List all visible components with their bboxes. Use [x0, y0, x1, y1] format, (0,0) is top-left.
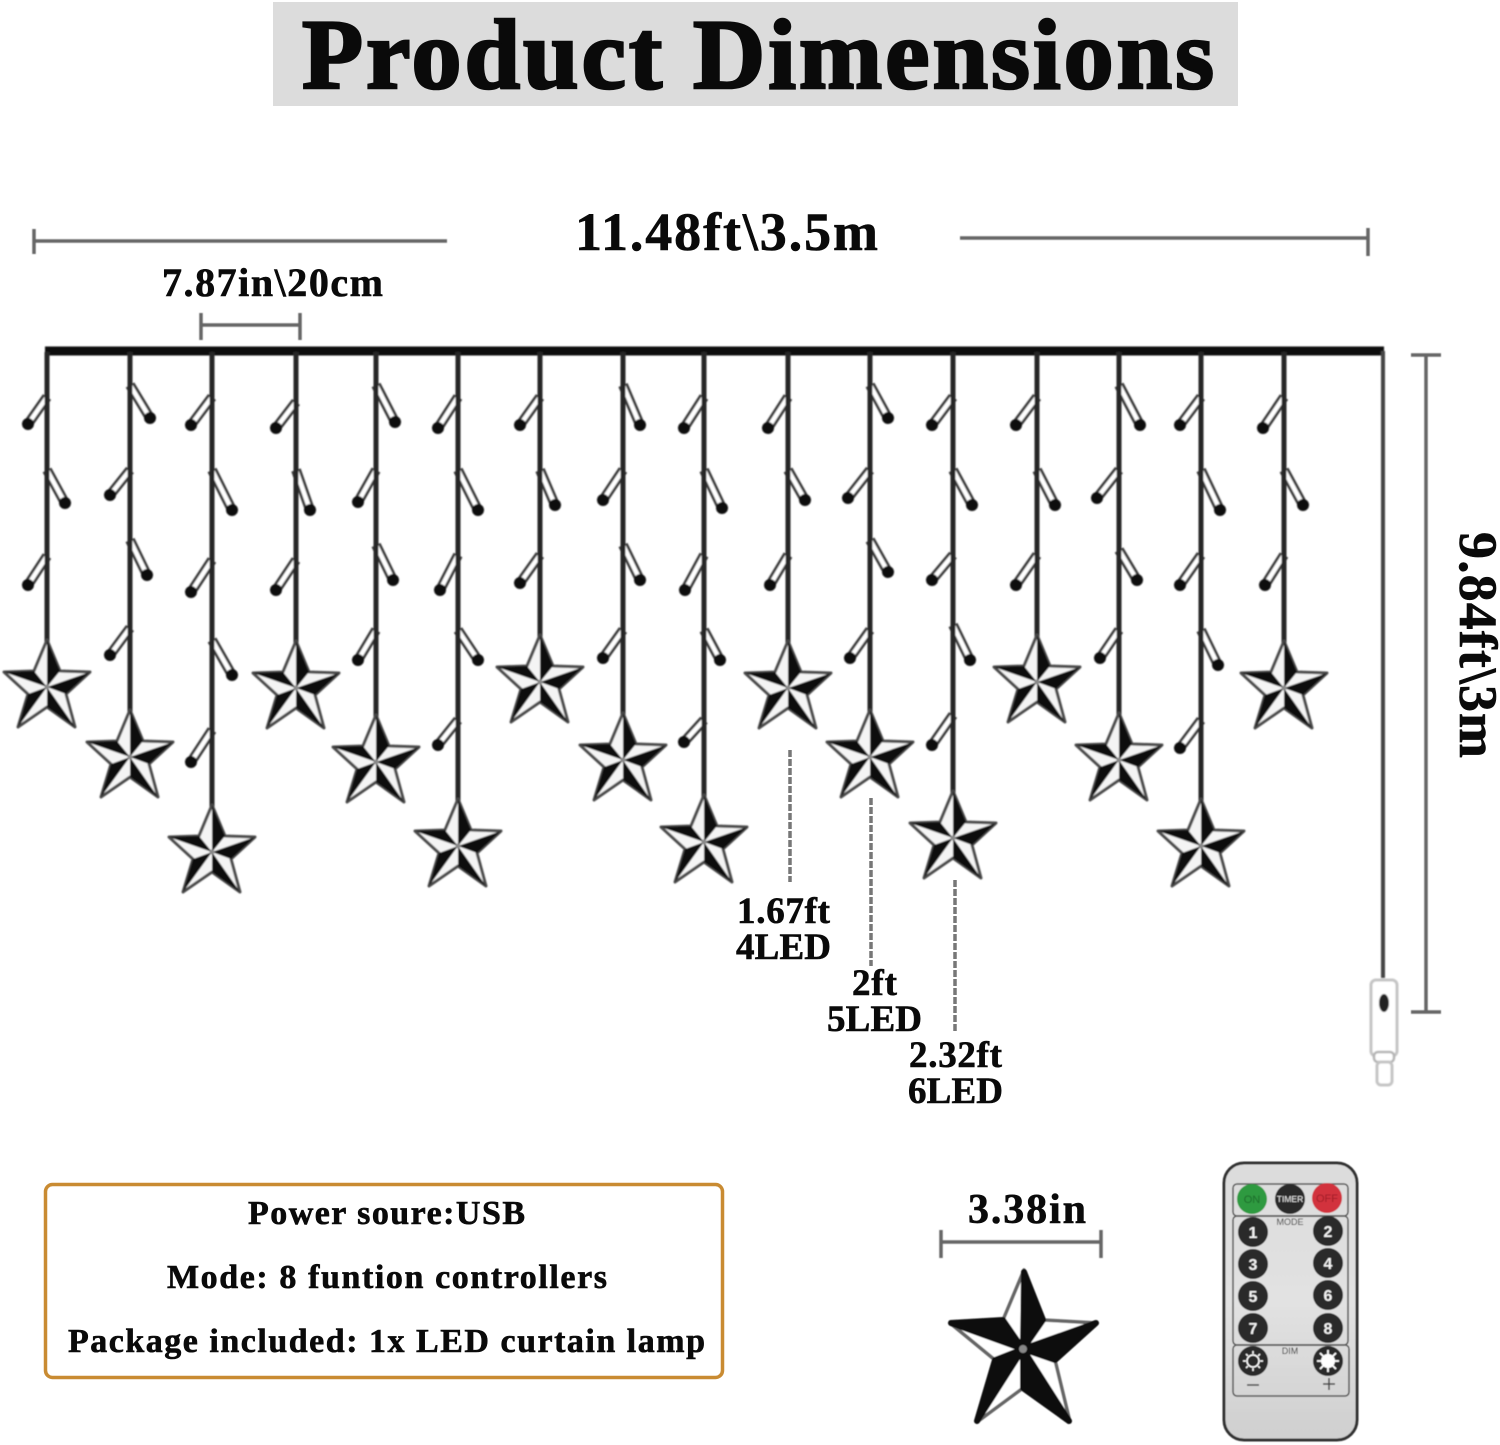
mode buttons: 6 [1324, 1288, 1333, 1305]
dim label: DIM [1282, 1346, 1298, 1356]
strand 10 [745, 352, 831, 728]
star size dimension: 3.38in: 3.38in [968, 1187, 1086, 1233]
width dimension: 11.48ft\3.5m: 11.48ft\3.5m [575, 202, 878, 262]
callout: 5LED strand: 5LED [827, 999, 922, 1040]
strand 12 [910, 352, 996, 878]
strand 8 [580, 352, 666, 800]
power and timer buttons: OFF [1316, 1193, 1338, 1205]
button group outlines [1233, 1184, 1349, 1396]
strand 15 [1158, 352, 1244, 886]
panel: product specs: Power soure:USB [248, 1195, 525, 1232]
callout: 6LED strand: 6LED [908, 1071, 1003, 1112]
strand 4 [253, 352, 339, 728]
strand 2 [87, 352, 173, 797]
strand 7 [497, 352, 583, 722]
mode buttons: 4 [1324, 1256, 1333, 1273]
strand 11 [827, 352, 913, 797]
strand 9 [661, 352, 747, 882]
callout: 4LED strand [736, 750, 831, 968]
strand 13 [994, 352, 1080, 722]
strand 16 [1241, 352, 1327, 728]
panel: product specs: Mode: 8 funtion controllers [167, 1259, 607, 1296]
strand 3 [169, 352, 255, 892]
width dimension: 11.48ft\3.5m [34, 202, 1368, 262]
callout: 5LED strand [827, 798, 922, 1040]
mode buttons: 5 [1249, 1289, 1258, 1306]
power and timer buttons: ON [1244, 1194, 1260, 1206]
mode label: MODE [1276, 1217, 1304, 1227]
brightness buttons [1238, 1346, 1343, 1390]
power and timer buttons: TIMER [1277, 1194, 1303, 1204]
strand 6 [415, 352, 501, 886]
star size dimension: 3.38in [941, 1187, 1101, 1258]
mode buttons: 7 [1249, 1321, 1258, 1338]
strand 5 [333, 352, 419, 802]
panel: product specs: Package included: 1x LED curtain lamp [68, 1323, 705, 1360]
strand spacing dimension: 7.87in\20cm [162, 260, 383, 340]
panel: product specs [46, 1184, 722, 1378]
strand length callouts [736, 750, 1003, 1112]
top wire [45, 346, 1384, 356]
title: Product Dimensions [302, 0, 1214, 110]
curtain light diagram [4, 351, 1397, 1085]
mode buttons: 1 [1249, 1225, 1258, 1242]
height dimension: 9.84ft\3m [1411, 355, 1500, 1012]
callout: 6LED strand: 2.32ft [909, 1035, 1003, 1076]
callout: 6LED strand [908, 880, 1003, 1112]
strand spacing dimension: 7.87in\20cm: 7.87in\20cm [162, 260, 383, 305]
remote control [1224, 1163, 1357, 1440]
strand 14 [1076, 352, 1162, 800]
mode buttons: 2 [1324, 1224, 1333, 1241]
icon: large star [950, 1270, 1097, 1422]
mode buttons: 8 [1324, 1321, 1333, 1338]
mode buttons: 3 [1249, 1257, 1258, 1274]
callout: 4LED strand: 4LED [736, 927, 831, 968]
strand 1 [4, 352, 90, 727]
mode buttons [1238, 1216, 1343, 1343]
power lead with USB controller [1371, 351, 1397, 1085]
callout: 5LED strand: 2ft [852, 963, 898, 1004]
power and timer buttons [1237, 1183, 1342, 1214]
callout: 4LED strand: 1.67ft [737, 891, 831, 932]
